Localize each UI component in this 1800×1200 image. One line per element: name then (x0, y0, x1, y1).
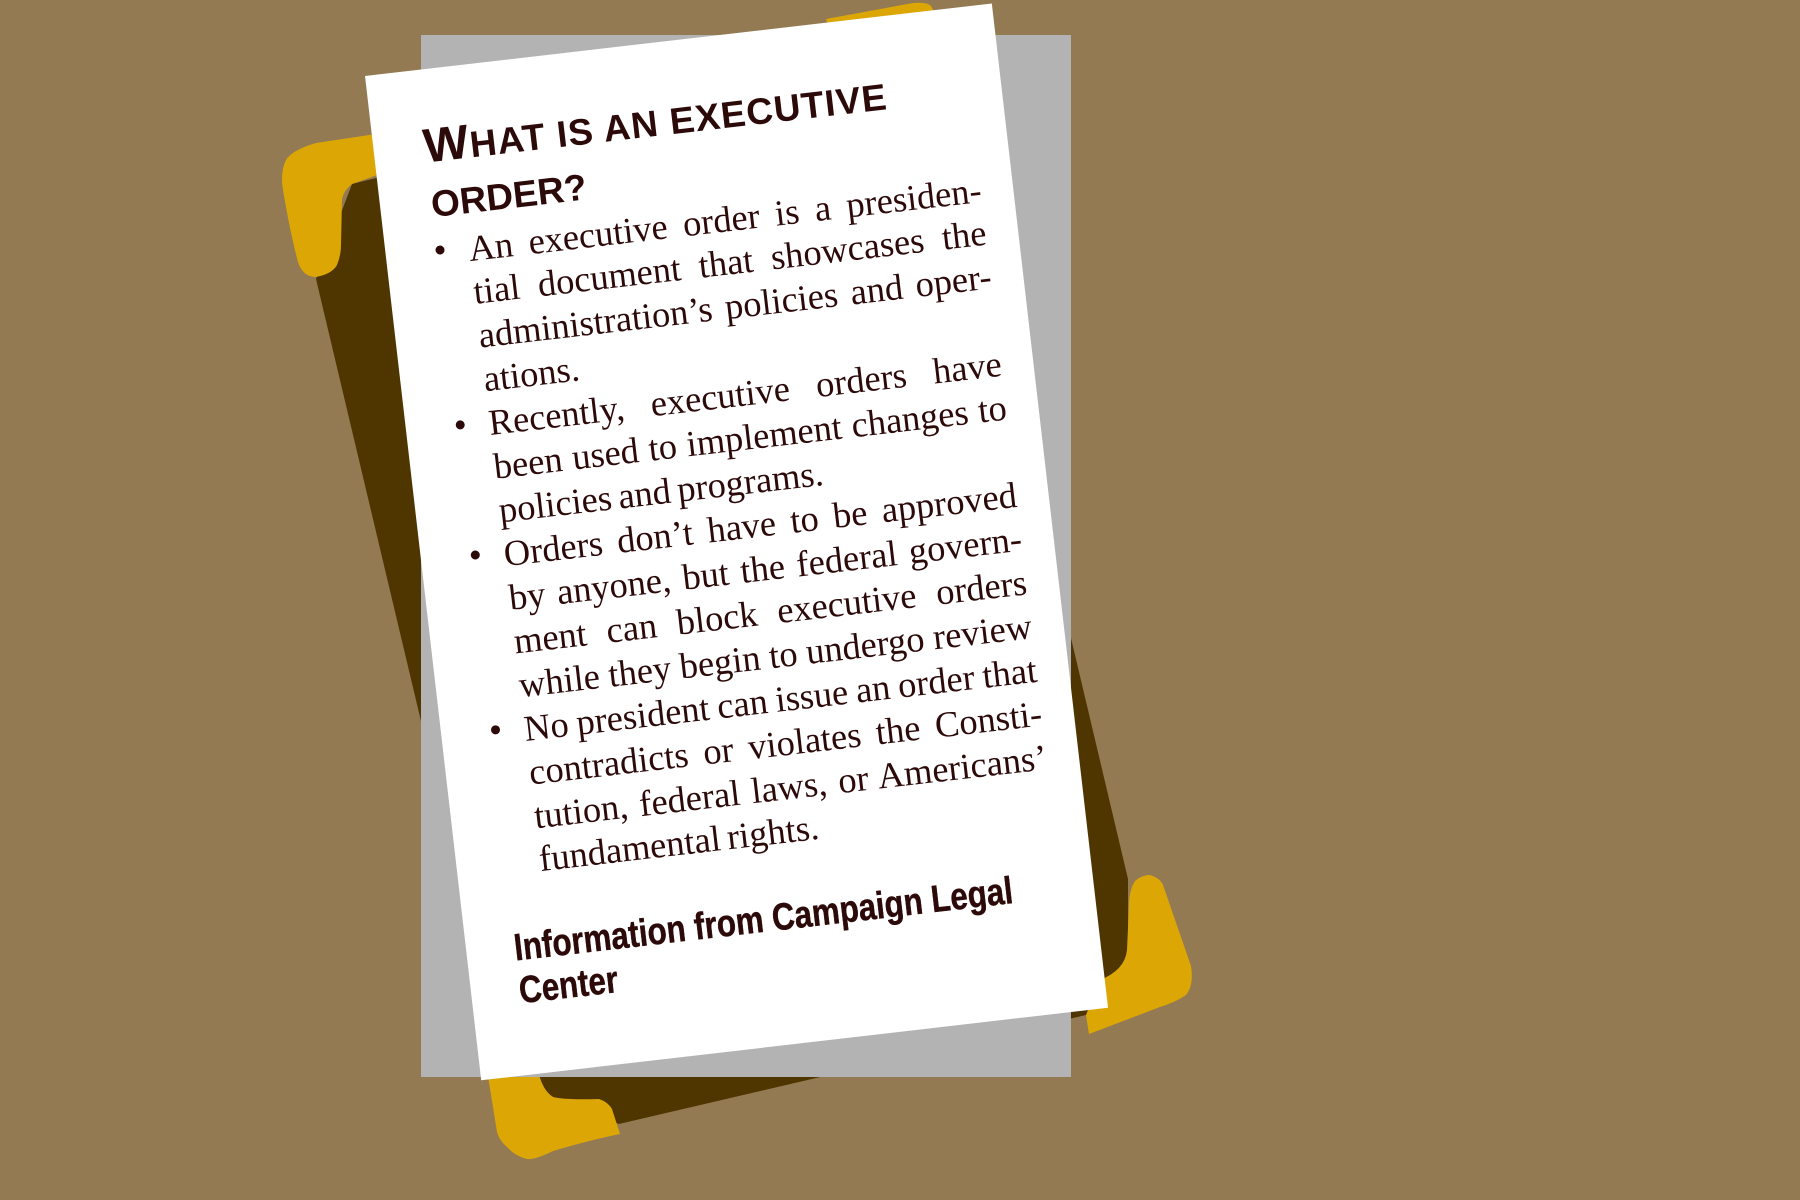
heading: ORDER? (429, 166, 589, 225)
bullet point 2 (456, 343, 1009, 530)
gold corner: top right (826, 3, 945, 30)
source credit: Center (517, 959, 620, 1012)
bullet list (436, 169, 1049, 879)
bullet point 1: tial document that showcases the (471, 212, 988, 312)
bullet point 2: Recently, executive orders have (486, 343, 1004, 443)
grey sheet behind page (421, 35, 1071, 1077)
source credit: Information from Campaign Legal (512, 870, 1015, 969)
folder back panel (316, 40, 1128, 1124)
source credit (512, 870, 1015, 1012)
bullet point 1: ations. (481, 347, 582, 399)
bullet point 4: contradicts or violates the Consti- (527, 693, 1044, 793)
bullet point 3 (470, 474, 1034, 705)
gold corner: bottom right (1086, 875, 1192, 1034)
gold corner: bottom left (487, 1070, 620, 1159)
bullet point 1: administration’s policies and oper- (476, 255, 993, 356)
bullet point 4: tution, federal laws, or Americans’ (532, 736, 1049, 836)
heading (421, 76, 889, 225)
bullet point 2: been used to implement changes to (491, 387, 1009, 487)
heading: WHAT IS AN EXECUTIVE (421, 76, 889, 174)
bullet point 4 (491, 649, 1049, 879)
bullet point 4: fundamental rights. (537, 806, 821, 879)
gold corner: top left (282, 134, 380, 277)
bullet point 1 (436, 169, 993, 399)
bullet point 3: ment can block executive orders (512, 561, 1029, 661)
bullet point 3: by anyone, but the federal govern- (507, 518, 1024, 618)
bullet point 4: No president can issue an order that (522, 649, 1039, 749)
bullet point 3: Orders don’t have to be approved (501, 474, 1019, 574)
bullet point 3: while they begin to undergo review (517, 605, 1034, 705)
bullet point 2: policies and programs. (496, 452, 825, 530)
bullet point 1: An executive order is a presiden- (466, 169, 983, 269)
panel: white document page (365, 3, 1108, 1080)
